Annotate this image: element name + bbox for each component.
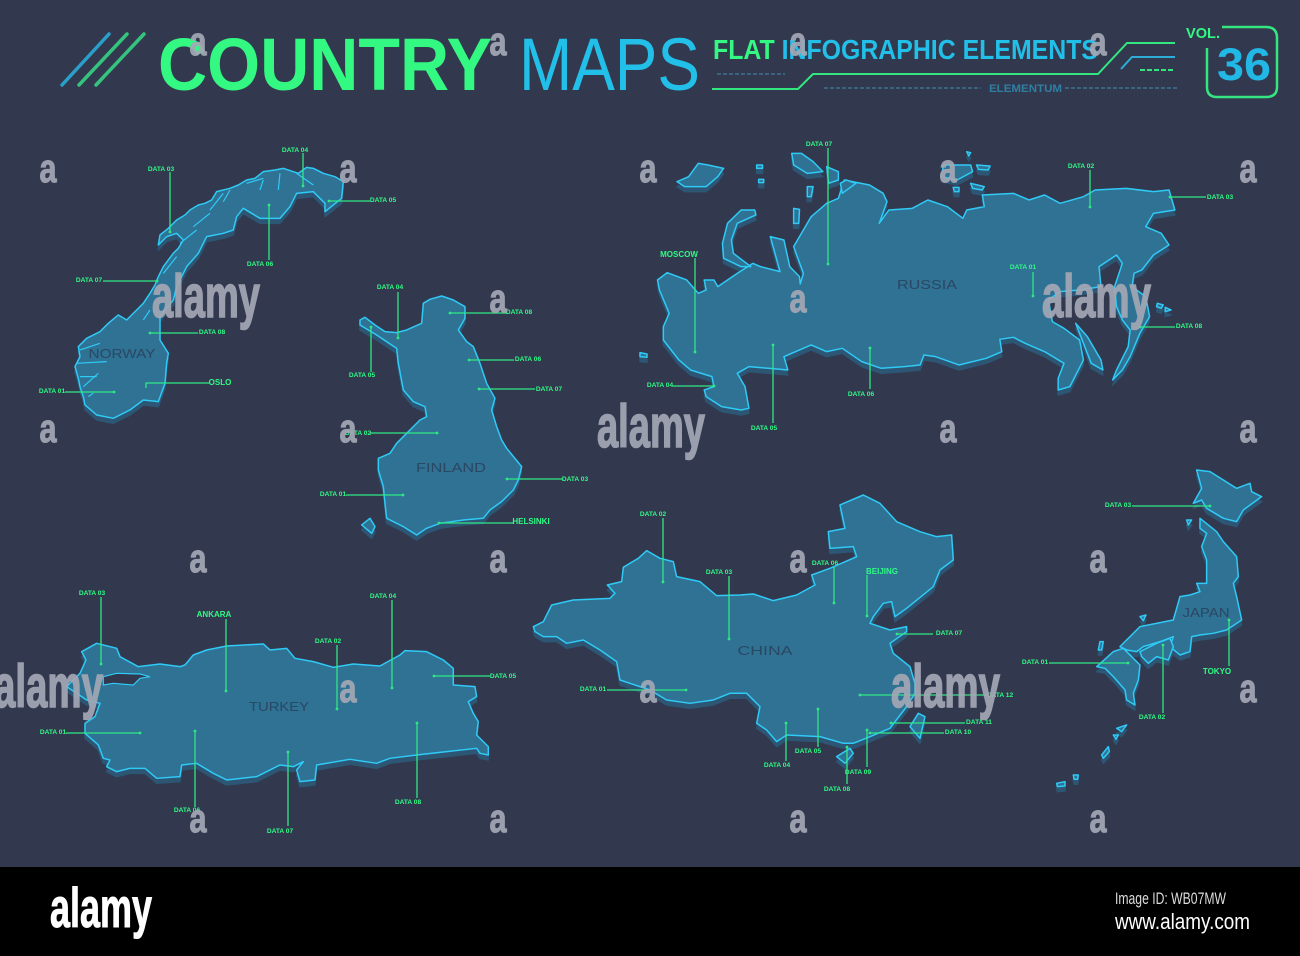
watermark overlay: a bbox=[790, 797, 807, 841]
panel: Japan bbox=[1022, 470, 1262, 787]
callout: Moscow: MOSCOW bbox=[660, 250, 698, 259]
watermark overlay: a bbox=[1240, 407, 1257, 451]
callout: data 02 bbox=[345, 430, 438, 437]
callout: data 08 bbox=[395, 722, 421, 806]
icon: three diagonal slashes bbox=[62, 34, 144, 85]
callout: data 02 bbox=[1139, 644, 1165, 721]
watermark overlay: a bbox=[1240, 147, 1257, 191]
map detail: Honshu bbox=[1120, 518, 1242, 655]
watermark overlay: a bbox=[340, 147, 357, 191]
callout: data 02: DATA 02 bbox=[640, 511, 666, 518]
callout: Oslo: OSLO bbox=[209, 378, 231, 387]
watermark overlay: a bbox=[640, 147, 657, 191]
callout: data 03 bbox=[79, 590, 105, 665]
callout: data 10: DATA 10 bbox=[945, 729, 971, 736]
callout: data 01: DATA 01 bbox=[1022, 659, 1048, 666]
callout: Moscow bbox=[660, 250, 698, 353]
callout: data 08: DATA 08 bbox=[1176, 323, 1202, 330]
callout: data 06 bbox=[848, 347, 874, 398]
callout: Tokyo: TOKYO bbox=[1203, 667, 1231, 676]
callout: data 05 bbox=[328, 197, 396, 204]
watermark overlay: alamy bbox=[152, 263, 260, 330]
callout: data 07 bbox=[478, 386, 562, 393]
callout: data 07 bbox=[267, 751, 293, 835]
map detail: Sakhalin and Kuril islands bbox=[1076, 303, 1171, 370]
callout: data 02: DATA 02 bbox=[1068, 163, 1094, 170]
callout: data 09: DATA 09 bbox=[845, 769, 871, 776]
panel: Russia bbox=[640, 141, 1233, 432]
callout: data 02: DATA 02 bbox=[315, 638, 341, 645]
map: Japan bbox=[1057, 470, 1262, 787]
map: Finland bbox=[360, 296, 522, 535]
callout: data 08: DATA 08 bbox=[395, 799, 421, 806]
callout: data 06: DATA 06 bbox=[848, 391, 874, 398]
callout: data 07 bbox=[76, 277, 158, 284]
watermark overlay: a bbox=[490, 20, 507, 64]
callout: data 08: DATA 08 bbox=[506, 309, 532, 316]
callout: data 01 bbox=[40, 729, 141, 736]
callout: data 03 bbox=[148, 166, 174, 233]
watermark overlay: a bbox=[640, 667, 657, 711]
callout: data 01: DATA 01 bbox=[39, 388, 65, 395]
panel: Finland bbox=[320, 284, 588, 535]
callout: data 01: DATA 01 bbox=[1010, 264, 1036, 271]
map detail: Shikoku, Kyushu and small islands bbox=[1057, 520, 1192, 787]
callout: data 01: DATA 01 bbox=[580, 686, 606, 693]
label: CHINA: CHINA bbox=[738, 643, 793, 658]
footer bar bbox=[0, 867, 1300, 956]
watermark overlay: a bbox=[340, 667, 357, 711]
map: China bbox=[533, 495, 953, 763]
map detail: Sea of Marmara bbox=[103, 673, 150, 685]
callout: Ankara: ANKARA bbox=[197, 610, 232, 619]
callout: data 07 bbox=[806, 141, 832, 265]
callout: data 08: DATA 08 bbox=[824, 786, 850, 793]
callout: data 07: DATA 07 bbox=[536, 386, 562, 393]
callout: data 06: DATA 06 bbox=[247, 261, 273, 268]
callout: data 01 bbox=[39, 388, 115, 395]
callout: data 03: DATA 03 bbox=[1105, 502, 1131, 509]
callout: data 04 bbox=[370, 593, 396, 689]
callout: data 05: DATA 05 bbox=[370, 197, 396, 204]
callout: data 03: DATA 03 bbox=[706, 569, 732, 576]
callout: data 06: DATA 06 bbox=[174, 807, 200, 814]
callout: data 08 bbox=[824, 746, 850, 793]
map detail: Hainan and Taiwan bbox=[837, 713, 925, 763]
callout: data 05 bbox=[349, 326, 375, 379]
watermark overlay: a bbox=[1090, 20, 1107, 64]
watermark overlay: a bbox=[40, 407, 57, 451]
callout: data 08 bbox=[449, 309, 532, 316]
label: TURKEY: TURKEY bbox=[249, 699, 309, 714]
header bbox=[62, 23, 1277, 106]
callout: data 07: DATA 07 bbox=[267, 828, 293, 835]
footer logo: alamy bbox=[50, 876, 152, 939]
website: www.alamy.com bbox=[1114, 909, 1250, 934]
image id: Image ID: WB07MW bbox=[1115, 889, 1226, 908]
panel: Turkey bbox=[40, 590, 516, 835]
panel: Norway bbox=[39, 147, 396, 418]
callout: data 06 bbox=[174, 730, 200, 814]
label: NORWAY: NORWAY bbox=[88, 346, 156, 361]
callout: Tokyo bbox=[1203, 619, 1231, 676]
callout: data 11 bbox=[890, 719, 992, 726]
label: RUSSIA: RUSSIA bbox=[897, 277, 957, 292]
watermark overlay: a bbox=[490, 797, 507, 841]
callout: data 04: DATA 04 bbox=[370, 593, 396, 600]
watermark overlay: a bbox=[190, 797, 207, 841]
callout: data 01 bbox=[320, 491, 404, 498]
callout: data 01 bbox=[580, 686, 687, 693]
label: JAPAN: JAPAN bbox=[1182, 605, 1230, 620]
callout: data 05 bbox=[795, 708, 821, 755]
header circuit lines bbox=[712, 43, 1177, 89]
callout: data 07: DATA 07 bbox=[76, 277, 102, 284]
callout: data 01: DATA 01 bbox=[40, 729, 66, 736]
callout: data 04: DATA 04 bbox=[282, 147, 308, 154]
callout: Beijing bbox=[866, 567, 898, 617]
callout: data 03 bbox=[1169, 194, 1233, 201]
callout: Ankara bbox=[197, 610, 232, 692]
callout: data 04 bbox=[282, 147, 308, 187]
callout: data 01: DATA 01 bbox=[320, 491, 346, 498]
watermark overlay: a bbox=[40, 147, 57, 191]
callout: data 04 bbox=[647, 382, 715, 389]
callout: data 03: DATA 03 bbox=[562, 476, 588, 483]
callout: data 12: DATA 12 bbox=[987, 692, 1013, 699]
watermark overlay: a bbox=[790, 537, 807, 581]
callout: Helsinki: HELSINKI bbox=[512, 517, 550, 526]
callout: data 03 bbox=[506, 476, 588, 483]
map detail: Novaya Zemlya arc bbox=[722, 210, 756, 267]
label: FINLAND: FINLAND bbox=[416, 460, 486, 475]
watermark overlay: a bbox=[940, 147, 957, 191]
watermark overlay: a bbox=[190, 537, 207, 581]
callout: data 07: DATA 07 bbox=[806, 141, 832, 148]
callout: data 10 bbox=[869, 729, 971, 736]
volume badge: VOL. bbox=[1186, 25, 1220, 42]
watermark overlay: a bbox=[940, 407, 957, 451]
callout: data 02 bbox=[1068, 163, 1094, 208]
map detail: Hokkaido bbox=[1193, 470, 1262, 522]
callout: data 05 bbox=[433, 673, 516, 680]
callout: data 05: DATA 05 bbox=[490, 673, 516, 680]
callout: Helsinki bbox=[438, 517, 550, 526]
watermark overlay: alamy bbox=[1042, 263, 1151, 330]
map: Norway bbox=[75, 167, 343, 418]
callout: data 03 bbox=[706, 569, 732, 640]
callout: data 07: DATA 07 bbox=[936, 630, 962, 637]
callout: Beijing: BEIJING bbox=[866, 567, 898, 576]
callout: data 06 bbox=[812, 560, 838, 604]
watermark overlay: a bbox=[490, 537, 507, 581]
watermark overlay: a bbox=[790, 20, 807, 64]
title: country: COUNTRY bbox=[158, 23, 492, 106]
callout: data 06: DATA 06 bbox=[812, 560, 838, 567]
map detail: arctic islands bbox=[640, 152, 990, 357]
callout: data 04: DATA 04 bbox=[764, 762, 790, 769]
callout: data 11: DATA 11 bbox=[966, 719, 992, 726]
subtitle: FLAT INFOGRAPHIC ELEMENTS bbox=[713, 34, 1098, 65]
callout: data 04 bbox=[377, 284, 403, 339]
watermark overlay: a bbox=[490, 277, 507, 321]
watermark overlay: a bbox=[1240, 667, 1257, 711]
watermark overlay: a bbox=[1090, 797, 1107, 841]
callout: data 04: DATA 04 bbox=[647, 382, 673, 389]
callout: data 04 bbox=[764, 722, 790, 769]
callout: data 08 bbox=[149, 329, 225, 336]
watermark overlay: a bbox=[790, 277, 807, 321]
map: Russia bbox=[640, 152, 1175, 410]
callout: data 03 bbox=[1105, 502, 1211, 509]
callout: data 01 bbox=[1022, 659, 1129, 666]
callout: data 05: DATA 05 bbox=[349, 372, 375, 379]
callout: Oslo bbox=[146, 378, 231, 388]
callout: data 04: DATA 04 bbox=[377, 284, 403, 291]
callout: data 08: DATA 08 bbox=[199, 329, 225, 336]
callout: data 01 bbox=[1010, 264, 1036, 297]
watermark overlay: a bbox=[190, 20, 207, 64]
watermark overlay: alamy bbox=[891, 653, 1000, 720]
elementum label: ELEMENTUM bbox=[989, 83, 1062, 95]
callout: data 07 bbox=[896, 630, 962, 637]
callout: data 06 bbox=[468, 356, 541, 363]
callout: data 05: DATA 05 bbox=[751, 425, 777, 432]
volume badge bbox=[1186, 25, 1277, 97]
callout: data 03: DATA 03 bbox=[1207, 194, 1233, 201]
callout: data 08 bbox=[1139, 323, 1202, 330]
title: maps: MAPS bbox=[519, 23, 700, 106]
callout: data 09 bbox=[845, 729, 871, 776]
callout: data 05: DATA 05 bbox=[795, 748, 821, 755]
callout: data 06 bbox=[247, 204, 273, 268]
callout: data 05 bbox=[751, 344, 777, 432]
map: Turkey bbox=[67, 643, 488, 782]
watermark overlay: a bbox=[340, 407, 357, 451]
volume badge: 36 bbox=[1217, 39, 1271, 90]
panel: China bbox=[533, 495, 1013, 793]
callout: data 02: DATA 02 bbox=[345, 430, 371, 437]
callout: data 03: DATA 03 bbox=[79, 590, 105, 597]
callout: data 02 bbox=[640, 511, 666, 583]
callout: data 03: DATA 03 bbox=[148, 166, 174, 173]
watermark overlay: a bbox=[1090, 537, 1107, 581]
callout: data 02: DATA 02 bbox=[1139, 714, 1165, 721]
callout: data 02 bbox=[315, 638, 341, 710]
watermark overlay: alamy bbox=[597, 393, 705, 460]
callout: data 06: DATA 06 bbox=[515, 356, 541, 363]
